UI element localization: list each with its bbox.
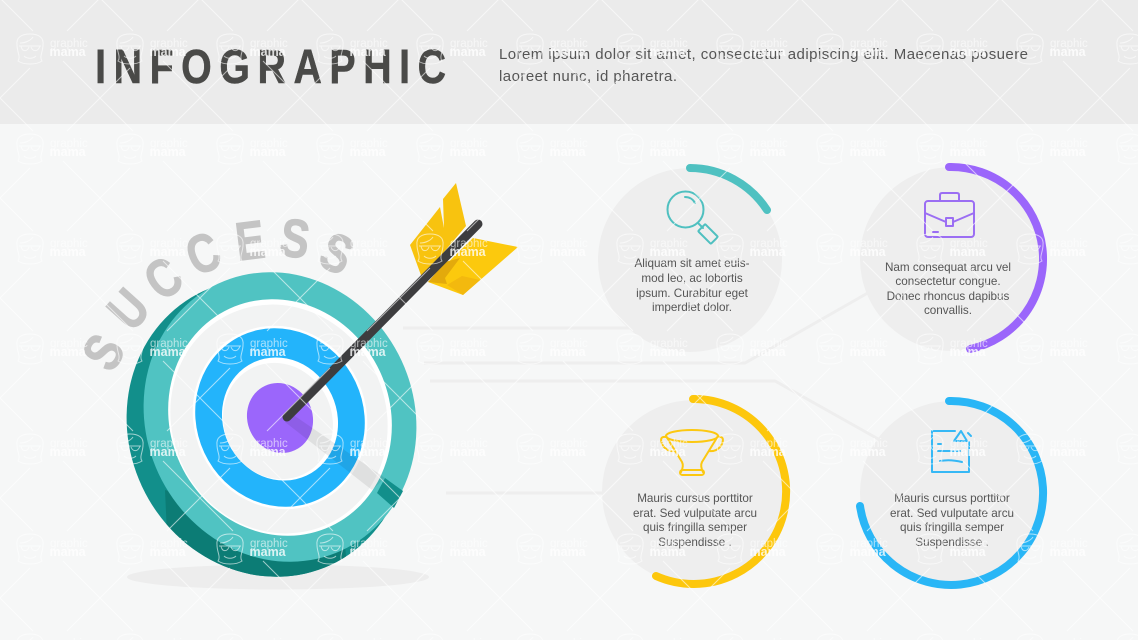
header description bbox=[499, 46, 1028, 85]
target blue ring bbox=[163, 297, 397, 538]
target inner ring bbox=[202, 338, 358, 500]
briefcase text: consectetur congue. bbox=[895, 275, 1001, 288]
document text: Mauris cursus porttitor bbox=[894, 492, 1010, 505]
search text bbox=[635, 257, 750, 314]
success lettering: U bbox=[96, 278, 162, 341]
search progress arc bbox=[690, 168, 767, 210]
arrow shadow bbox=[285, 414, 403, 508]
search text: imperdiet dolor. bbox=[652, 301, 732, 314]
trophy text: erat. Sed vulputate arcu bbox=[633, 507, 757, 520]
briefcase text: Nam consequat arcu vel bbox=[885, 261, 1011, 274]
trophy text: Suspendisse . bbox=[658, 536, 732, 549]
trophy progress arc bbox=[656, 399, 786, 584]
search text: ipsum. Curabitur eget bbox=[636, 287, 749, 300]
success lettering: S bbox=[311, 221, 362, 287]
header description: laoreet nunc, id pharetra. bbox=[499, 68, 677, 85]
icon: trophy bbox=[661, 430, 723, 475]
briefcase text: convallis. bbox=[924, 304, 972, 317]
trophy text: Mauris cursus porttitor bbox=[637, 492, 753, 505]
target white ring bbox=[130, 262, 430, 573]
arrow fletching bbox=[410, 183, 518, 295]
briefcase text bbox=[885, 261, 1011, 317]
document text: erat. Sed vulputate arcu bbox=[890, 507, 1014, 520]
success lettering bbox=[71, 208, 362, 381]
target outer ring bbox=[96, 227, 464, 607]
panel: trophy bbox=[602, 399, 786, 584]
panel: briefcase bbox=[860, 167, 1044, 351]
icon: magnifier bbox=[668, 192, 718, 244]
trophy text bbox=[633, 492, 757, 549]
search text: mod leo, ac lobortis bbox=[641, 272, 743, 285]
panel: search bbox=[598, 168, 782, 352]
document text bbox=[890, 492, 1014, 549]
document progress arc bbox=[860, 401, 1043, 585]
arrow bbox=[287, 183, 518, 417]
icon: document bbox=[932, 431, 971, 472]
ground shadow bbox=[127, 564, 429, 590]
connector lines bbox=[403, 290, 880, 493]
briefcase progress arc bbox=[949, 167, 1043, 349]
target board bbox=[126, 272, 416, 577]
header band bbox=[0, 0, 1138, 124]
icon: briefcase bbox=[925, 193, 974, 237]
trophy text: quis fringilla semper bbox=[643, 521, 747, 534]
success lettering: S bbox=[71, 325, 137, 381]
document text: quis fringilla semper bbox=[900, 521, 1004, 534]
bullseye bbox=[236, 372, 324, 464]
document text: Suspendisse . bbox=[915, 536, 989, 549]
success lettering: C bbox=[178, 221, 229, 288]
success lettering: E bbox=[232, 210, 268, 273]
target side bbox=[126, 288, 386, 577]
panel: document bbox=[860, 401, 1044, 585]
success lettering: C bbox=[134, 246, 194, 312]
success lettering: S bbox=[276, 208, 313, 271]
arrow shaft bbox=[287, 224, 478, 417]
search text: Aliquam sit amet euis- bbox=[635, 257, 750, 270]
header description: Lorem ipsum dolor sit amet, consectetur adipiscing elit. Maecenas posuere bbox=[499, 46, 1028, 63]
title: INFOGRAPHIC bbox=[95, 40, 446, 94]
briefcase text: Donec rhoncus dapibus bbox=[887, 290, 1010, 303]
